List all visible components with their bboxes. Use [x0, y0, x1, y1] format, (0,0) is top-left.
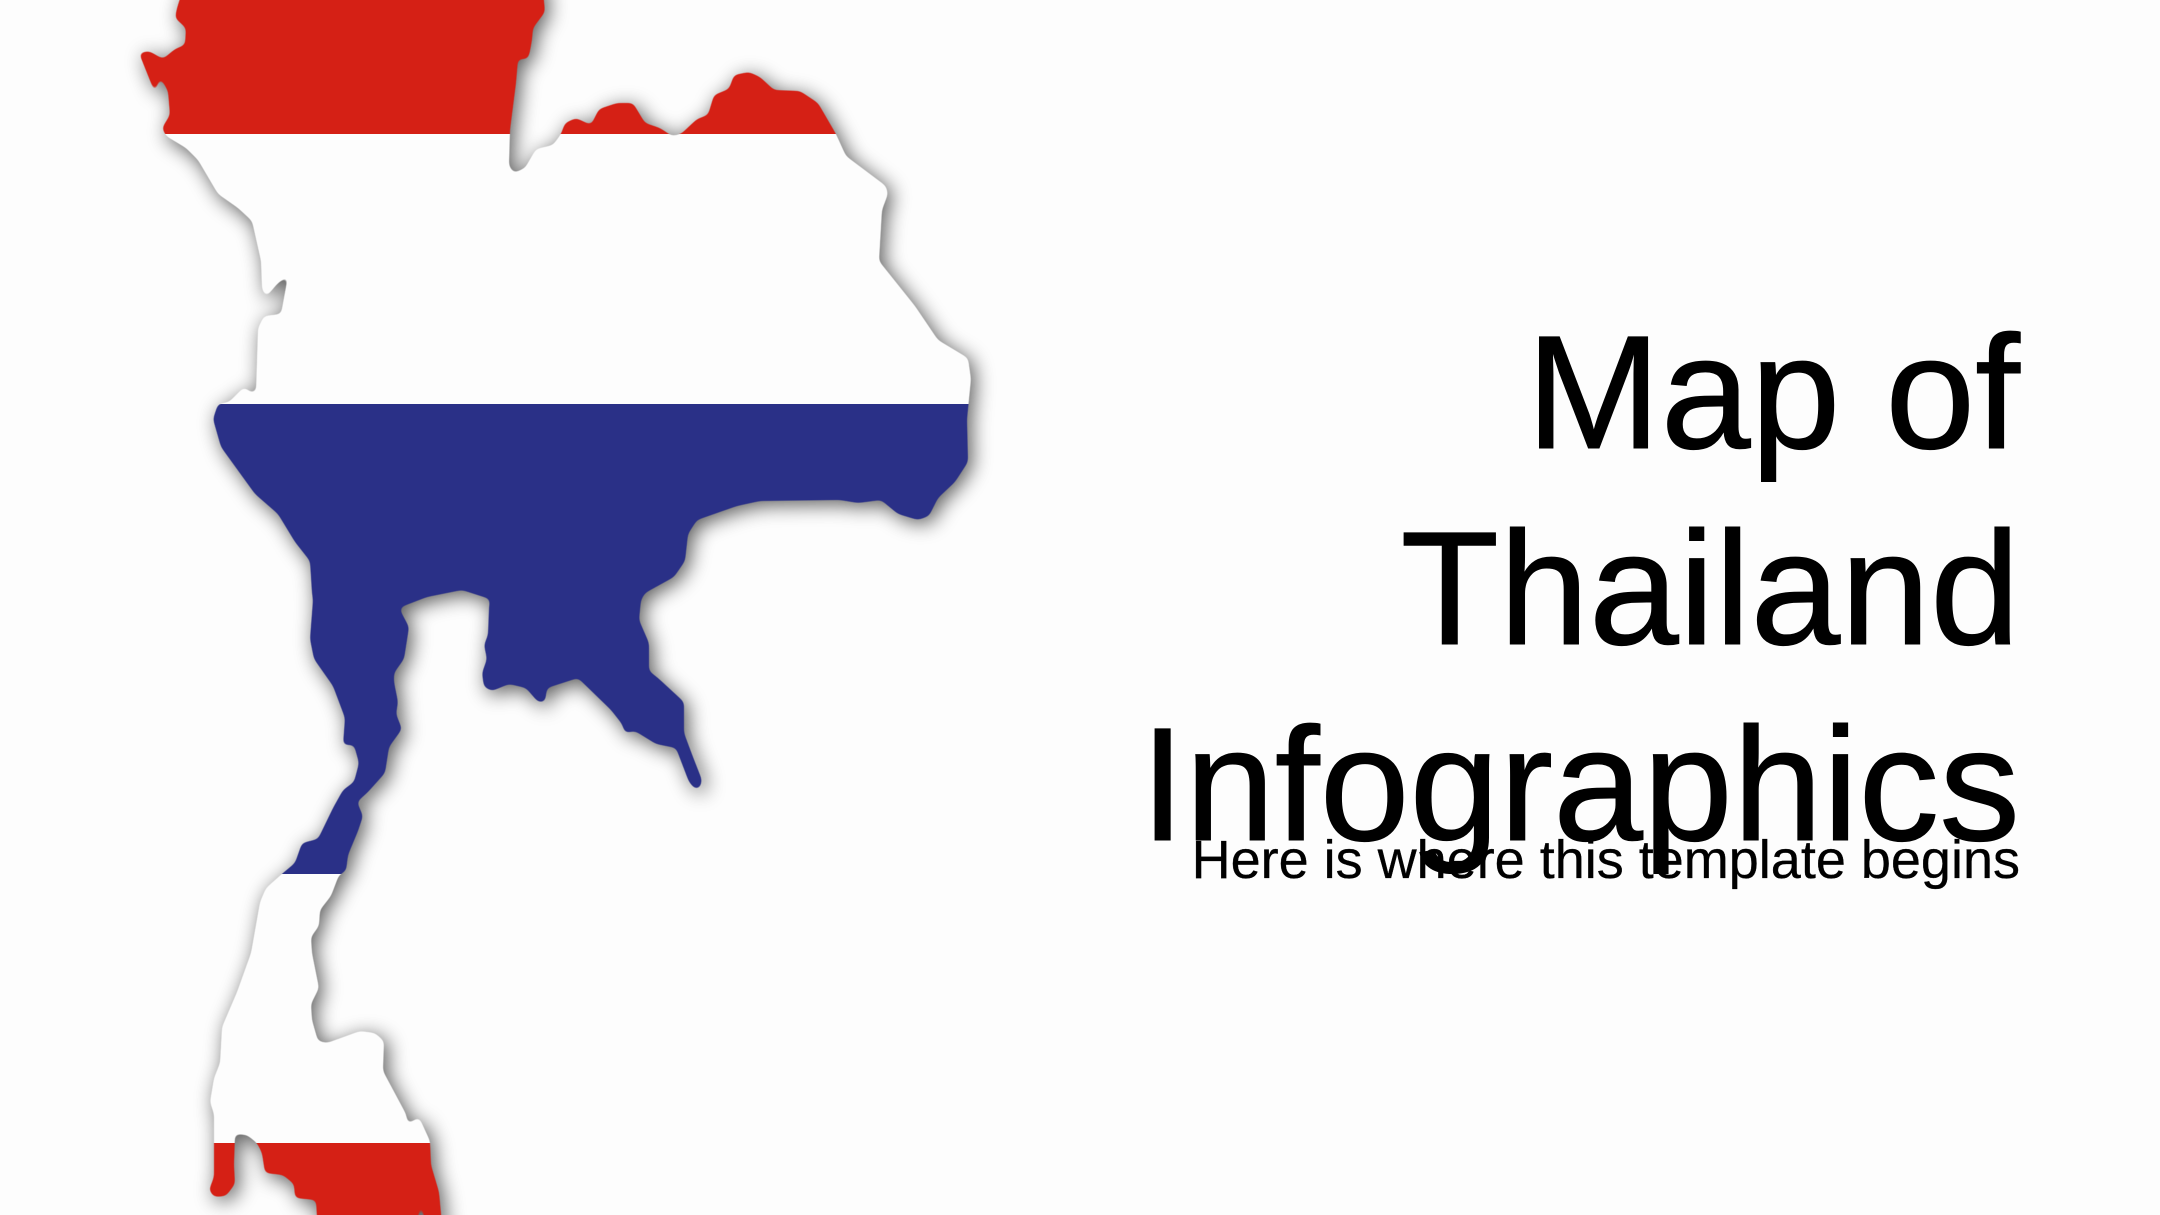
map of Thailand filled with the flag: [132, 0, 990, 1215]
flag-striped country shape: [140, 0, 971, 1215]
title: Infographics: [1140, 694, 2020, 874]
title: Thailand: [1400, 498, 2020, 678]
subtitle: Here is where this template begins: [1192, 830, 2020, 890]
title: Map of: [1526, 302, 2020, 482]
title: [1140, 302, 2021, 874]
map shadow: [143, 0, 975, 1215]
